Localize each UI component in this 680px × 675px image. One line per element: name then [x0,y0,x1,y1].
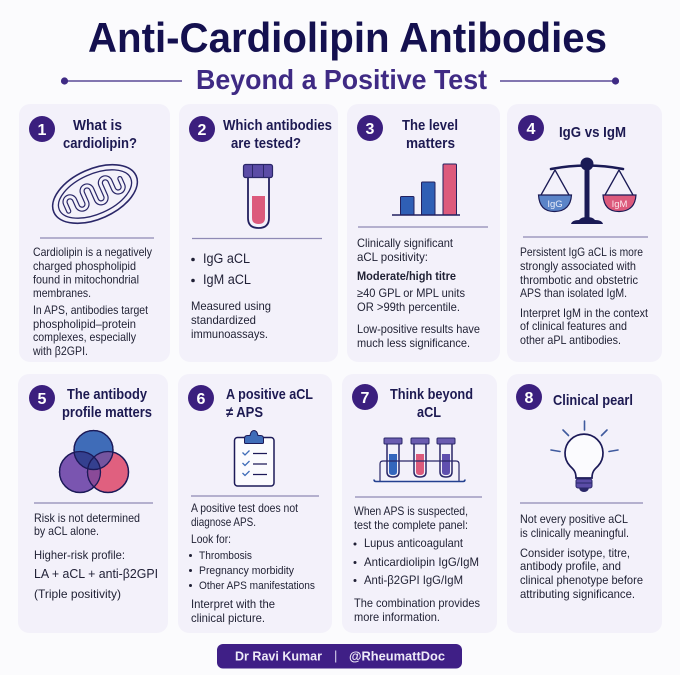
body text 7: When APS is suspected, [354,505,468,518]
heading 1: cardiolipin? [63,135,137,152]
body text 5 [34,512,158,601]
number badge 8: 8 [525,390,534,407]
icon: balance scale: IgM [612,199,628,210]
divider [34,502,153,504]
body text 6: diagnose APS. [191,516,256,529]
body text 6: clinical picture. [191,612,265,625]
panel: 5 antibody profile [18,374,168,633]
heading 5: profile matters [62,404,152,421]
divider [355,496,482,498]
body text 1: complexes, especially [33,331,136,344]
footer credit bar: | [334,648,337,663]
body text 4: Interpret IgM in the context [520,307,649,320]
subtitle: Beyond a Positive Test [196,64,487,95]
icon: balance scale [538,158,636,224]
heading 5: The antibody [67,386,148,403]
heading 5 [62,386,152,421]
heading 6 [226,386,313,421]
body text 4: APS than isolated IgM. [520,287,627,300]
panel: 3 the level matters [347,104,500,362]
body text 1 [32,246,152,358]
icon: light bulb [551,421,618,492]
body text 2: IgM aCL [203,272,251,287]
body text 3: much less significance. [357,337,470,350]
divider [191,495,319,497]
panel: 6 positive aCL not APS [178,374,332,633]
heading 3: The level [402,117,458,134]
body text 2: standardized [191,314,256,327]
icon: mitochondrion [44,153,146,235]
divider [523,236,648,238]
body text 1: Cardiolipin is a negatively [33,246,152,259]
subtitle left ornament [61,77,182,85]
divider [520,502,643,504]
body text 3 [357,237,480,350]
heading 6: ≠ APS [226,404,263,421]
body text 7: Lupus anticoagulant [364,537,464,550]
bar chart [392,164,460,215]
body text 8: is clinically meaningful. [520,527,629,540]
heading 4: IgG vs IgM [559,124,626,141]
body text 1: charged phospholipid [33,260,136,273]
panel: 2 which antibodies [179,104,338,362]
body text 2 [191,251,271,341]
footer credit bar: Dr Ravi Kumar [235,648,322,664]
body text 5: Risk is not determined [34,512,140,525]
heading 7 [390,386,473,421]
body text 4 [520,246,649,347]
panel: 7 think beyond aCL [342,374,497,633]
body text 7: The combination provides [354,597,480,610]
icon: balance scale: IgG [547,199,563,210]
body text 2: immunoassays. [191,328,268,341]
number badge 1 [29,116,55,142]
body text 1: In APS, antibodies target [33,304,149,317]
body text 4: strongly associated with [520,260,636,273]
heading 6: A positive aCL [226,386,313,403]
panel: 8 clinical pearl [507,374,662,633]
body text 3: aCL positivity: [357,251,428,264]
body text 8 [520,513,643,601]
body text 6: Other APS manifestations [199,580,315,592]
subtitle right ornament [500,77,619,85]
body text 7: test the complete panel: [354,519,468,532]
body text 4: thrombotic and obstetric [520,274,638,287]
body text 7: Anti-β2GPI IgG/IgM [364,574,463,587]
body text 6: Interpret with the [191,598,275,611]
heading 3: matters [406,135,455,152]
body text 4: Persistent IgG aCL is more [520,246,643,259]
body text 5: (Triple positivity) [34,588,121,601]
number badge 6: 6 [197,391,206,408]
body text 5: Higher-risk profile: [34,549,125,562]
number badge 3: 3 [366,121,375,138]
heading 2: are tested? [231,135,301,152]
body text 1: membranes. [33,287,91,300]
body text 2: Measured using [191,300,271,313]
body text 7: more information. [354,611,440,624]
number badge 3 [357,115,383,141]
icon: clipboard [234,430,274,486]
heading 2 [223,117,332,152]
body text 3: Moderate/high titre [357,270,457,283]
body text 3: ≥40 GPL or MPL units [357,287,465,300]
number badge 5: 5 [38,391,47,408]
body text 6: Thrombosis [199,550,252,562]
body text 1: found in mitochondrial [33,274,139,286]
number badge 7 [352,384,378,410]
body text 7: Anticardiolipin IgG/IgM [364,556,479,569]
heading 8: Clinical pearl [553,392,633,409]
body text 7 [354,505,480,624]
divider [192,238,322,240]
body text 3: Low-positive results have [357,323,480,336]
body text 6: Pregnancy morbidity [199,565,294,577]
number badge 4: 4 [527,121,536,138]
panel: 1 what is cardiolipin [19,104,170,362]
body text 1: phospholipid–protein [33,318,136,331]
number badge 4 [518,115,544,141]
body text 8: antibody profile, and [520,560,621,573]
icon: test tube [244,164,272,228]
number badge 2: 2 [198,122,207,139]
body text 8: Not every positive aCL [520,513,629,526]
body text 5: LA + aCL + anti-β2GPI [34,566,158,581]
body text 1: with β2GPI. [32,345,88,358]
body text 6: Look for: [191,533,231,546]
title: Anti-Cardiolipin Antibodies [88,14,607,61]
heading 7: Think beyond [390,386,473,403]
heading 1 [63,117,137,152]
number badge 5 [29,385,55,411]
number badge 8 [516,384,542,410]
body text 8: clinical phenotype before [520,574,643,587]
body text 6 [189,502,315,625]
body text 3: Clinically significant [357,237,454,250]
footer credit bar [217,644,462,668]
icon: test tube rack [374,438,465,482]
body text 6: A positive test does not [191,502,299,515]
body text 3: OR >99th percentile. [357,301,460,314]
divider [40,237,154,239]
heading 3 [402,117,458,152]
number badge 2 [189,116,215,142]
number badge 1: 1 [38,122,47,139]
heading 1: What is [73,117,122,134]
heading 2: Which antibodies [223,117,332,134]
number badge 7: 7 [361,390,370,407]
number badge 6 [188,385,214,411]
heading 7: aCL [417,404,441,421]
divider [358,226,488,228]
body text 8: attributing significance. [520,588,635,601]
panel: 4 IgG vs IgM [507,104,662,362]
body text 4: other aPL antibodies. [520,334,621,347]
icon: venn diagram [60,430,128,492]
body text 8: Consider isotype, titre, [520,547,630,560]
body text 2: IgG aCL [203,251,250,266]
footer credit bar: @RheumattDoc [349,648,445,664]
body text 5: by aCL alone. [34,525,99,538]
body text 4: of clinical features and [520,320,627,333]
